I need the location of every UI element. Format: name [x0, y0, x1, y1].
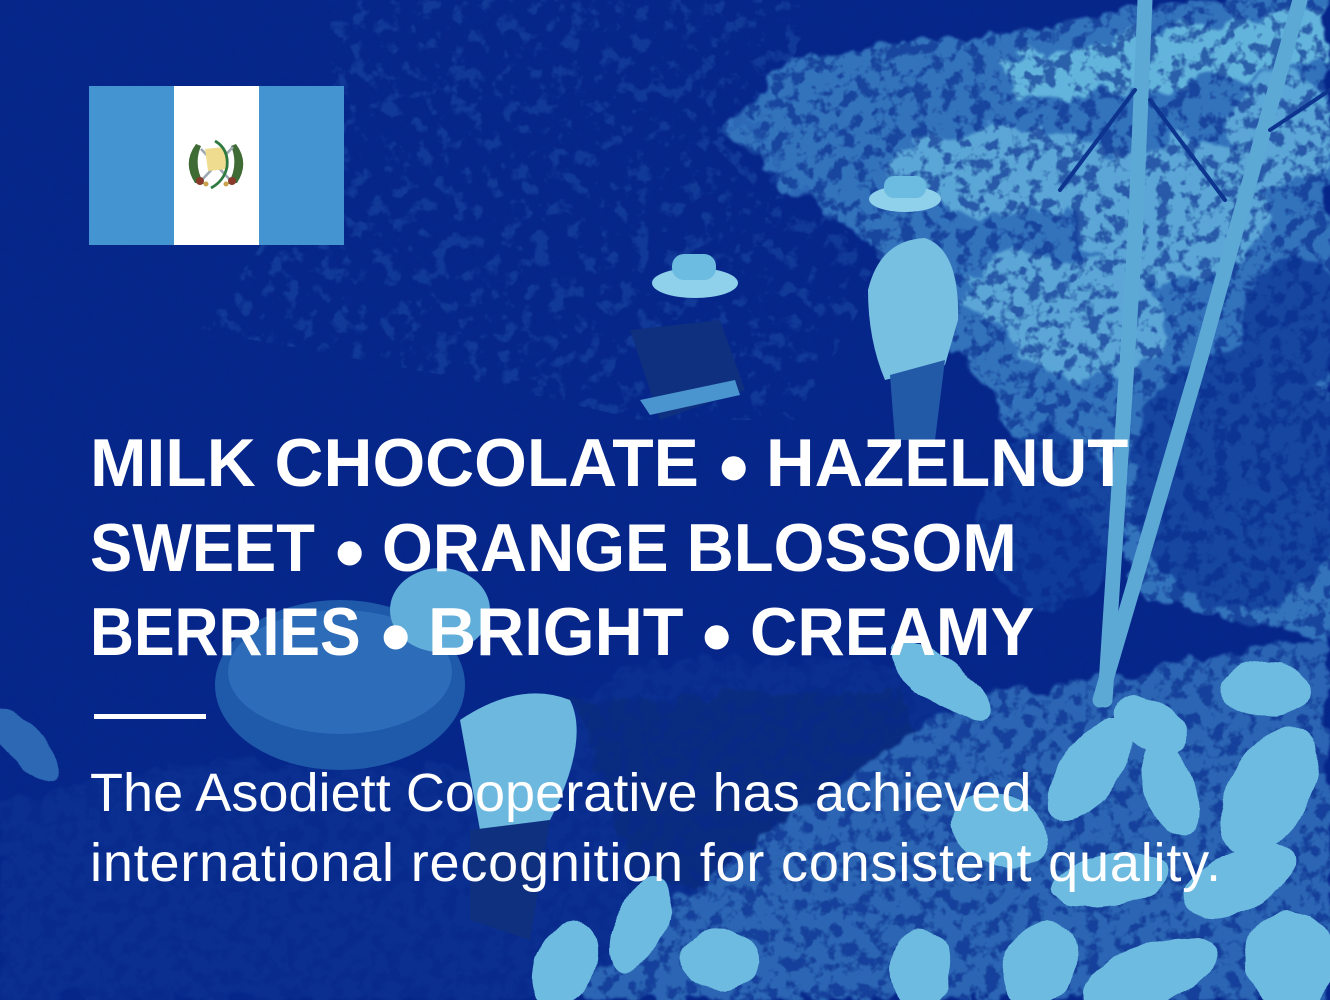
heading: flavor notes: MILK CHOCOLATE: [90, 425, 699, 501]
heading: flavor notes: ORANGE BLOSSOM: [382, 510, 1017, 586]
body text: international recognition for consistent quality.: [90, 833, 1222, 893]
body text: The Asodiett Cooperative has achieved: [90, 763, 1031, 823]
flag of Guatemala: [89, 86, 344, 245]
farmer middle: [630, 254, 745, 420]
foliage upper left: [202, 0, 872, 420]
saplings: [1060, 0, 1330, 700]
heading: flavor notes: BERRIES: [90, 594, 361, 670]
farmer right: [868, 176, 958, 440]
farmer bottom: [390, 568, 577, 940]
heading: flavor notes: •: [702, 589, 731, 683]
meadow upper right: [720, 0, 1330, 640]
leaves lower right: [0, 628, 1330, 1000]
lower ground: [0, 640, 1330, 1000]
heading: flavor notes: CREAMY: [750, 594, 1034, 670]
heading: flavor notes: [90, 420, 1128, 683]
tub: [215, 600, 465, 770]
heading: flavor notes: SWEET: [90, 510, 315, 586]
heading: flavor notes: BRIGHT: [428, 594, 683, 670]
divider rule: [94, 714, 206, 719]
icon: coat of arms: [188, 140, 244, 190]
body text: [90, 763, 1222, 893]
heading: flavor notes: •: [719, 420, 748, 514]
heading: flavor notes: •: [381, 589, 410, 683]
heading: flavor notes: •: [335, 505, 364, 599]
heading: flavor notes: HAZELNUT: [766, 425, 1128, 501]
